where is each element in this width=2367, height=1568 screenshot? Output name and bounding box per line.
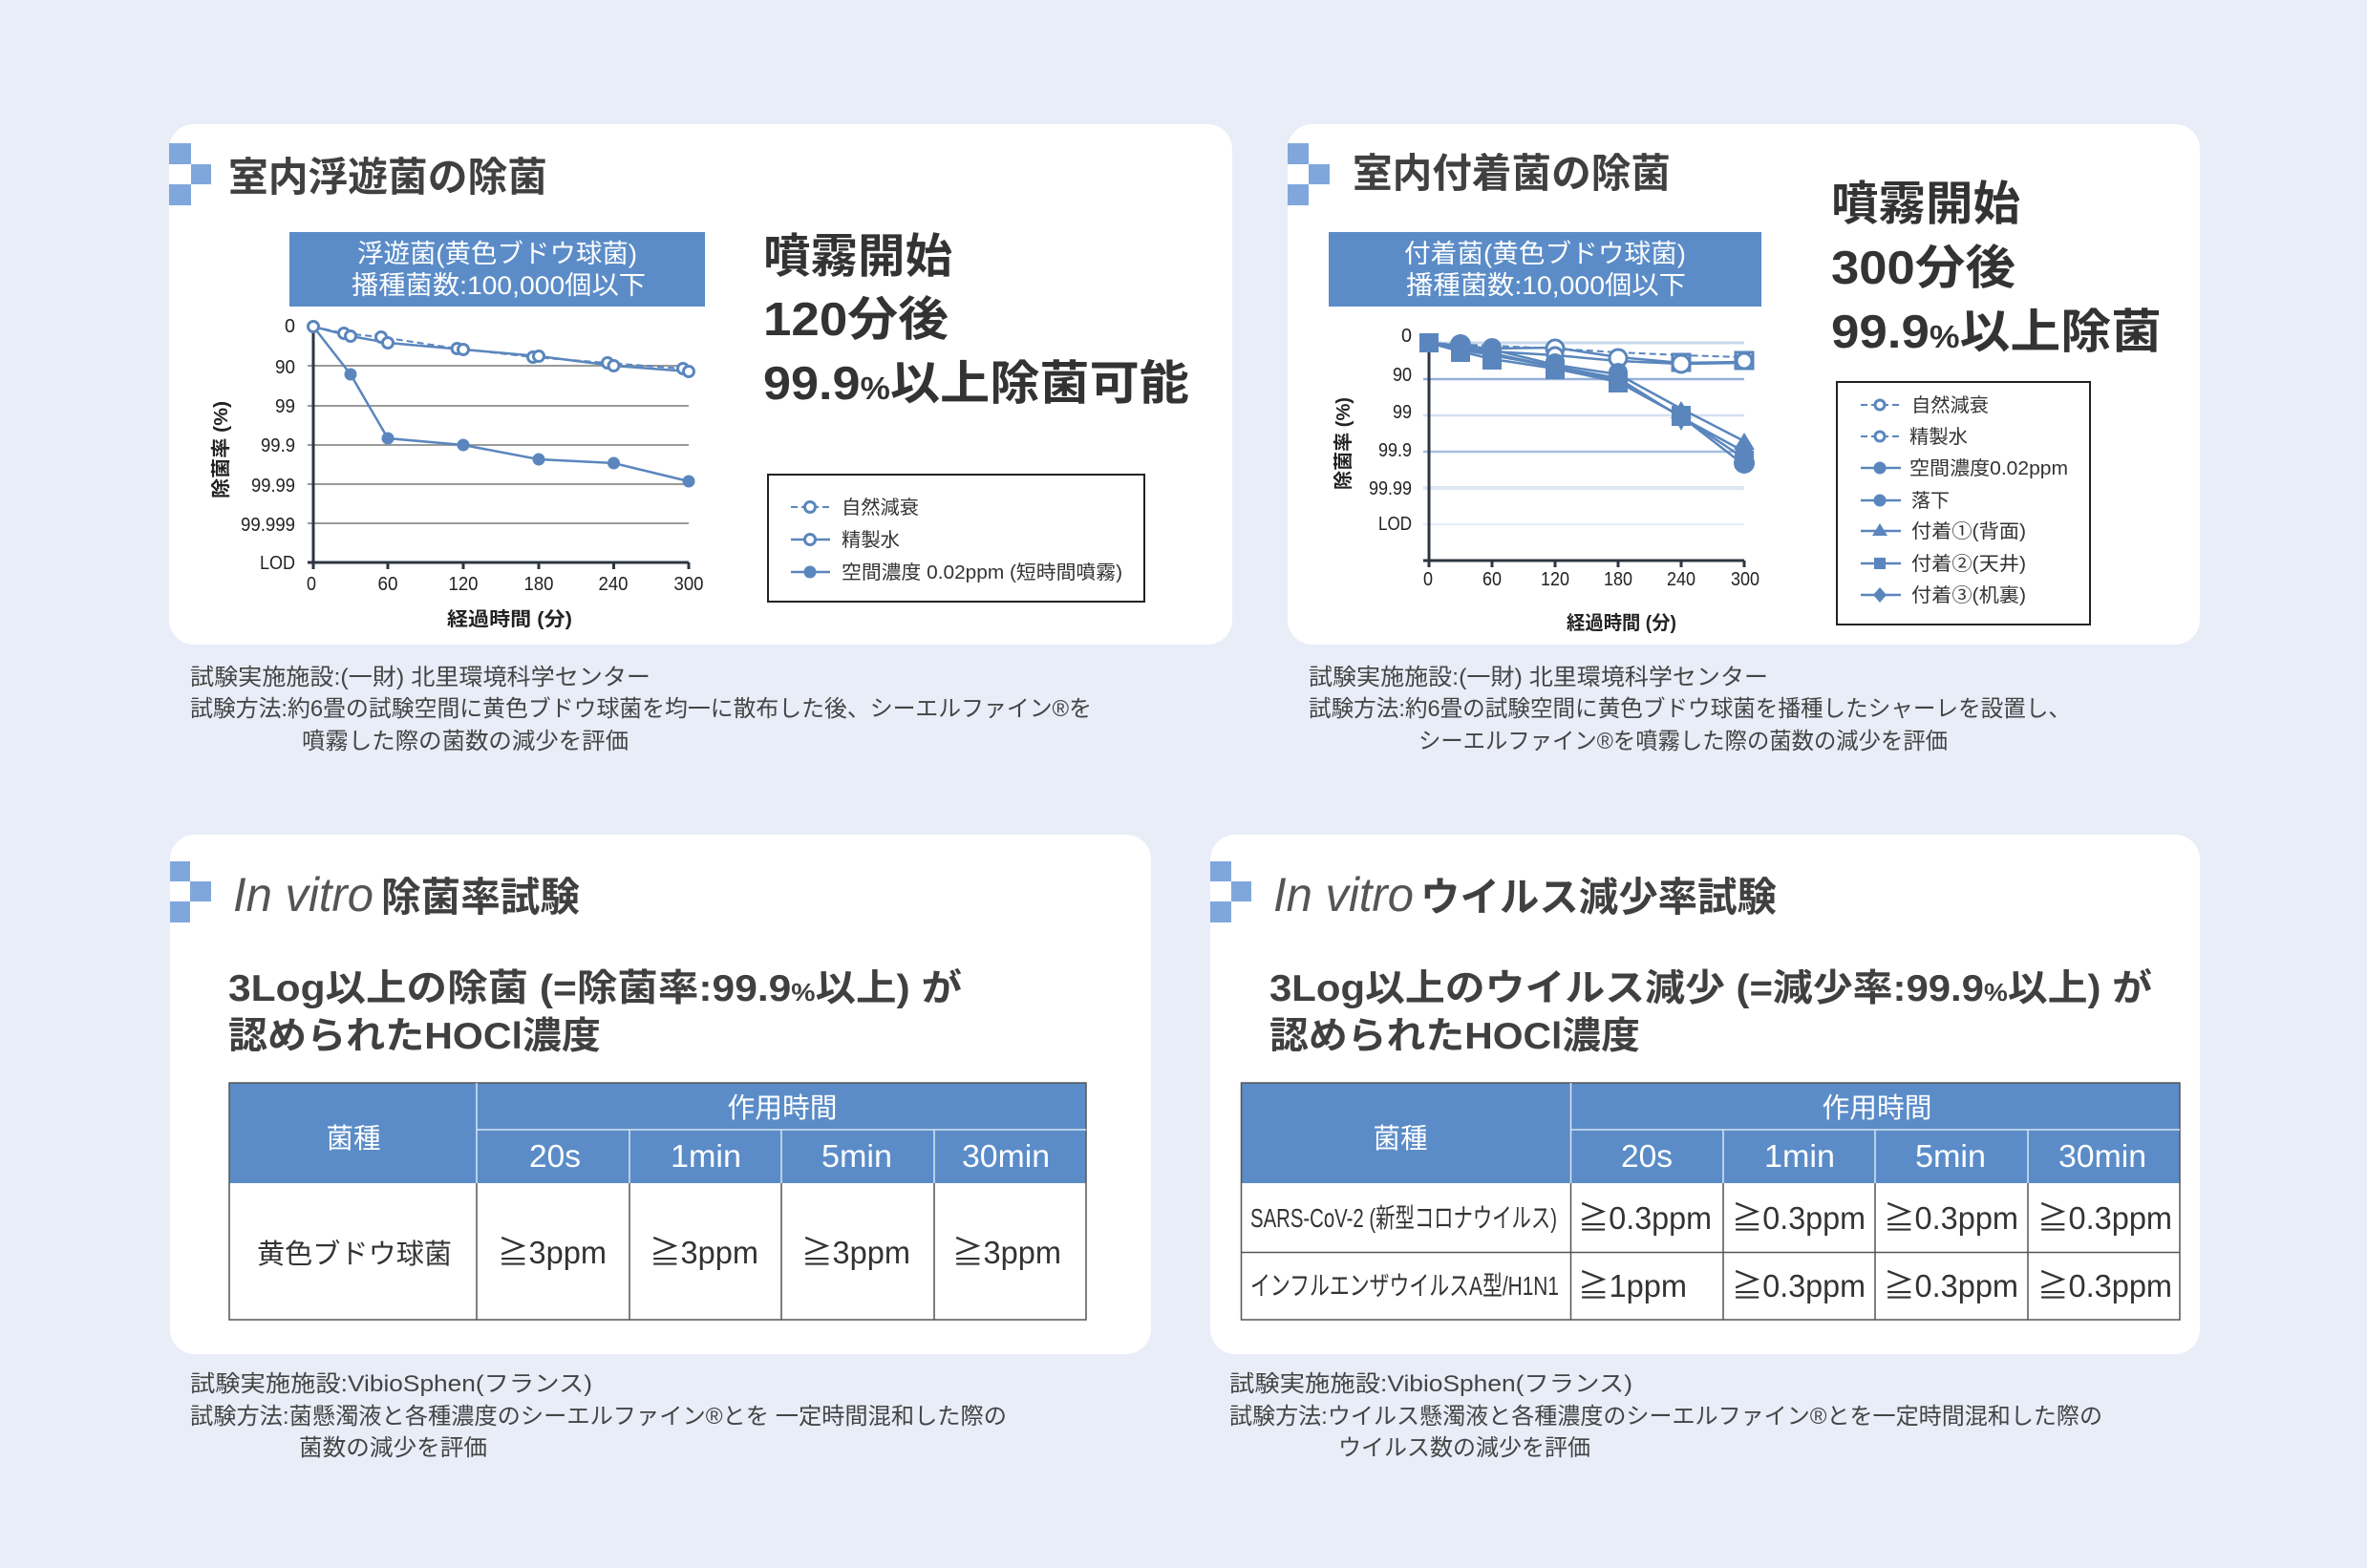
heading: in vitro virus: ウイルス減少率試験	[1420, 875, 1777, 920]
icon: checker squares	[1210, 861, 1251, 922]
line chart: airborne	[210, 316, 703, 630]
legend: surface: 精製水	[1909, 426, 1968, 448]
table: virus concentrations: 菌種	[1374, 1123, 1427, 1155]
line chart: airborne: 99.999	[241, 515, 295, 536]
line chart: airborne: 除菌率 (%)	[210, 401, 232, 498]
legend: airborne: 自然減衰	[842, 497, 919, 519]
heading: in vitro bactericidal: 除菌率試験	[381, 875, 580, 920]
table: virus concentrations: ≧0.3ppm	[1884, 1200, 2018, 1236]
subtitle: virus concentration: 認められたHOCl濃度	[1269, 1016, 1640, 1057]
legend: airborne: 精製水	[842, 529, 900, 551]
line chart: airborne: 180	[523, 574, 554, 595]
subtitle: virus concentration: 3Log以上のウイルス減少 (=減少率:99.9 %以上) が	[1269, 968, 2152, 1009]
notes: virus test: 試験方法:ウイルス懸濁液と各種濃度のシーエルファイン®とを一定時間混和した際の	[1229, 1404, 2102, 1430]
table: virus concentrations: 20s	[1621, 1138, 1673, 1174]
table: bactericidal concentrations: 5min	[821, 1138, 892, 1174]
heading: airborne: 室内浮遊菌の除菌	[228, 155, 547, 200]
line chart: surface: 99	[1393, 402, 1412, 423]
panel: surface bacteria removal	[1288, 124, 2200, 645]
notes: bactericidal test: 菌数の減少を評価	[299, 1435, 487, 1461]
line chart: surface: 0	[1401, 326, 1412, 347]
legend: surface: 落下	[1911, 490, 1950, 512]
callout: airborne result: 120分後	[763, 294, 949, 346]
table: virus concentrations: ≧0.3ppm	[1732, 1268, 1866, 1303]
panel: airborne bacteria removal	[169, 124, 1232, 645]
line chart: surface: 経過時間 (分)	[1567, 612, 1676, 634]
table: virus concentrations: ≧0.3ppm	[2037, 1268, 2172, 1303]
notes: bactericidal test	[190, 1371, 1007, 1461]
legend: airborne	[768, 475, 1144, 602]
callout: airborne result	[763, 231, 1189, 410]
table: virus concentrations: 1min	[1764, 1138, 1835, 1174]
table: virus concentrations: ≧0.3ppm	[1884, 1268, 2018, 1303]
table: bactericidal concentrations: 黄色ブドウ球菌	[257, 1239, 452, 1270]
line chart: airborne: 120	[449, 574, 478, 595]
line chart: surface: LOD	[1378, 514, 1412, 535]
table: bactericidal concentrations: 1min	[671, 1138, 741, 1174]
table: virus concentrations: インフルエンザウイルスA型/H1N1	[1250, 1271, 1559, 1301]
table: virus concentrations	[1242, 1083, 2180, 1320]
chart header: airborne: 播種菌数:100,000個以下	[352, 271, 646, 300]
notes: virus test: 試験実施施設:VibioSphen(フランス)	[1229, 1371, 1632, 1397]
legend: surface: 自然減衰	[1911, 394, 1989, 416]
table: virus concentrations: ≧0.3ppm	[1732, 1200, 1866, 1236]
line chart: surface: 除菌率 (%)	[1333, 397, 1354, 490]
line chart: surface: 60	[1482, 569, 1502, 590]
line chart: surface: 99.99	[1369, 478, 1412, 499]
table: bactericidal concentrations: 20s	[529, 1138, 581, 1174]
notes: surface test: シーエルファイン®を噴霧した際の菌数の減少を評価	[1418, 729, 1948, 754]
panel: in vitro bactericidal test	[170, 835, 1151, 1354]
heading: surface: 室内付着菌の除菌	[1353, 151, 1671, 196]
line chart: airborne: 240	[598, 574, 629, 595]
subtitle: bactericidal concentration	[228, 968, 962, 1057]
notes: airborne test: 噴霧した際の菌数の減少を評価	[302, 729, 629, 754]
icon: checker squares	[169, 143, 211, 205]
heading: in vitro virus	[1273, 868, 1777, 922]
notes: bactericidal test: 試験実施施設:VibioSphen(フランス)	[190, 1371, 592, 1397]
table: bactericidal concentrations: ≧3ppm	[498, 1235, 607, 1270]
line chart: surface: 240	[1667, 569, 1695, 590]
legend: surface	[1837, 382, 2090, 625]
notes: bactericidal test: 試験方法:菌懸濁液と各種濃度のシーエルファイン®とを 一定時間混和した際の	[190, 1404, 1007, 1430]
line chart: airborne: 99.9	[261, 435, 295, 456]
subtitle: bactericidal concentration: 認められたHOCl濃度	[228, 1016, 601, 1057]
line chart: surface	[1333, 326, 1759, 634]
notes: airborne test: 試験方法:約6畳の試験空間に黄色ブドウ球菌を均一に散布した後、シーエルファイン®を	[190, 696, 1092, 722]
line chart: surface: 90	[1393, 365, 1412, 386]
notes: airborne test	[190, 665, 1092, 754]
table: virus concentrations: 30min	[2058, 1138, 2146, 1174]
line chart: surface: 300	[1731, 569, 1759, 590]
table: bactericidal concentrations: 作用時間	[728, 1092, 837, 1124]
legend: airborne: 空間濃度 0.02ppm (短時間噴霧)	[842, 562, 1122, 583]
panel: in vitro virus test	[1210, 835, 2200, 1354]
callout: surface result	[1831, 179, 2162, 358]
table: bactericidal concentrations: ≧3ppm	[801, 1235, 910, 1270]
line chart: airborne: 60	[378, 574, 397, 595]
table: virus concentrations: ≧0.3ppm	[1578, 1200, 1712, 1236]
table: virus concentrations: SARS-CoV-2 (新型コロナウイルス)	[1250, 1203, 1557, 1233]
subtitle: bactericidal concentration: 3Log以上の除菌 (=除菌率:99.9 %以上) が	[228, 968, 962, 1009]
table: bactericidal concentrations: 30min	[962, 1138, 1050, 1174]
line chart: airborne: 99.99	[251, 476, 295, 497]
table: bactericidal concentrations: ≧3ppm	[952, 1235, 1061, 1270]
heading: in vitro bactericidal	[233, 868, 580, 922]
chart header: surface: 播種菌数:10,000個以下	[1406, 271, 1686, 300]
notes: surface test: 試験実施施設:(一財) 北里環境科学センター	[1309, 665, 1768, 690]
callout: airborne result: 噴霧開始	[763, 231, 952, 283]
icon: checker squares	[1288, 143, 1330, 205]
callout: surface result: 300分後	[1831, 243, 2015, 294]
notes: surface test: 試験方法:約6畳の試験空間に黄色ブドウ球菌を播種したシャーレを設置し、	[1309, 696, 2071, 722]
line chart: airborne: 90	[275, 357, 295, 378]
notes: virus test	[1229, 1371, 2102, 1461]
chart header: airborne: 浮遊菌(黄色ブドウ球菌)	[357, 240, 637, 268]
notes: airborne test: 試験実施施設:(一財) 北里環境科学センター	[190, 665, 650, 690]
table: bactericidal concentrations: 菌種	[327, 1123, 380, 1155]
line chart: surface: 0	[1423, 569, 1433, 590]
table: virus concentrations: ≧0.3ppm	[2037, 1200, 2172, 1236]
subtitle: virus concentration	[1269, 968, 2152, 1057]
chart header: airborne	[289, 232, 705, 307]
callout: surface result: 99.9%以上除菌	[1831, 307, 2162, 358]
chart header: surface	[1329, 232, 1761, 307]
line chart: airborne: 0	[285, 316, 295, 337]
table: bactericidal concentrations	[229, 1083, 1086, 1320]
table: virus concentrations: 作用時間	[1823, 1092, 1931, 1124]
line chart: airborne: 0	[307, 574, 316, 595]
notes: surface test	[1309, 665, 2071, 754]
line chart: airborne: 経過時間 (分)	[447, 608, 572, 630]
notes: virus test: ウイルス数の減少を評価	[1338, 1435, 1590, 1461]
line chart: surface: 180	[1604, 569, 1632, 590]
legend: surface: 空間濃度0.02ppm	[1909, 457, 2068, 479]
callout: airborne result: 99.9%以上除菌可能	[763, 358, 1189, 410]
chart header: surface: 付着菌(黄色ブドウ球菌)	[1404, 240, 1686, 268]
callout: surface result: 噴霧開始	[1831, 179, 2020, 230]
legend: surface: 付着③(机裏)	[1911, 584, 2026, 606]
table: virus concentrations: 5min	[1915, 1138, 1986, 1174]
line chart: surface: 99.9	[1378, 440, 1412, 461]
heading: in vitro bactericidal: In vitro	[233, 868, 373, 922]
legend: surface: 付着①(背面)	[1911, 520, 2026, 542]
line chart: surface: 120	[1541, 569, 1569, 590]
icon: checker squares	[170, 861, 211, 922]
table: virus concentrations: ≧1ppm	[1578, 1268, 1687, 1303]
heading: in vitro virus: In vitro	[1273, 868, 1414, 922]
legend: surface: 付着②(天井)	[1911, 553, 2026, 575]
line chart: airborne: 99	[275, 396, 295, 417]
line chart: airborne: 300	[674, 574, 703, 595]
line chart: airborne: LOD	[260, 553, 295, 574]
table: bactericidal concentrations: ≧3ppm	[650, 1235, 758, 1270]
